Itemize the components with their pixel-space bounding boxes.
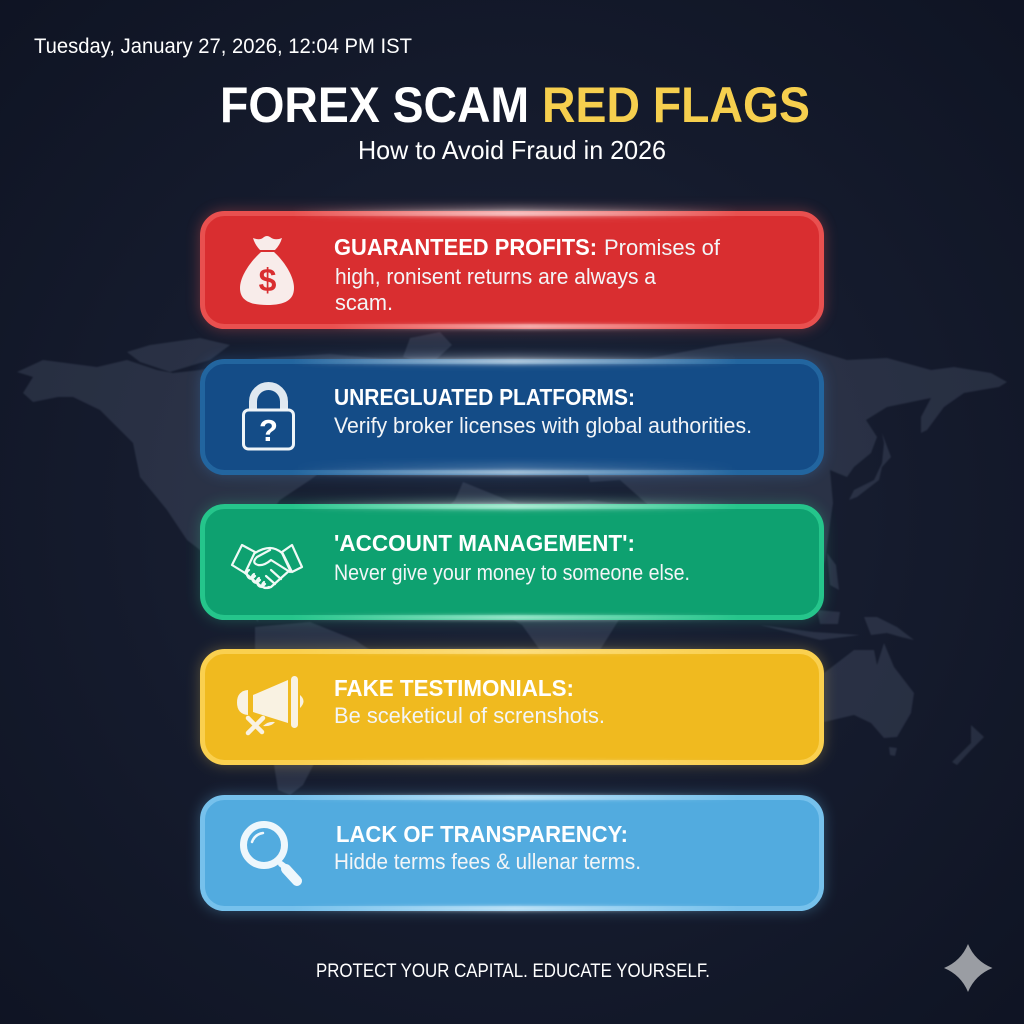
text: fake testimonials: Be sceketicul of screnshots. — [334, 703, 605, 728]
text: account management: 'ACCOUNT MANAGEMENT': — [334, 530, 635, 556]
text: lack of transparency — [334, 821, 641, 874]
world map — [17, 332, 1007, 795]
panel: unregulated platforms — [200, 355, 824, 475]
text: guaranteed profits: scam. — [335, 290, 393, 315]
text: guaranteed profits: Promises of — [604, 235, 721, 260]
text: unregulated platforms — [334, 384, 752, 438]
text: fake testimonials — [334, 675, 605, 728]
subtitle: How to Avoid Fraud in 2026 — [358, 135, 666, 165]
title: FOREX SCAM RED FLAGS — [220, 77, 810, 133]
text: guaranteed profits: GUARANTEED PROFITS: — [334, 234, 597, 260]
text: lack of transparency: Hidde terms fees & ullenar terms. — [334, 849, 641, 874]
text: unregulated platforms: Verify broker licenses with global authorities. — [334, 413, 752, 438]
icon: padlock with question mark — [244, 386, 294, 449]
panel: guaranteed profits — [200, 207, 824, 329]
text: fake testimonials: FAKE TESTIMONIALS: — [334, 675, 574, 701]
panel: account management — [200, 500, 824, 620]
text: guaranteed profits: high, ronisent returns are always a — [335, 264, 657, 289]
date and time: Tuesday, January 27, 2026, 12:04 PM IST — [34, 35, 412, 58]
icon: money bag: $ — [259, 262, 277, 298]
icon: padlock with question mark: ? — [259, 413, 278, 448]
icon: handshake — [232, 545, 302, 588]
panel: fake testimonials — [200, 649, 824, 765]
icon: megaphone with cross — [237, 676, 304, 733]
text: account management — [334, 530, 690, 585]
panel: lack of transparency — [200, 795, 824, 911]
text: guaranteed profits — [334, 234, 721, 315]
text: account management: Never give your money to someone else. — [334, 560, 690, 585]
icon: sparkle — [944, 944, 992, 992]
footer tagline: PROTECT YOUR CAPITAL. EDUCATE YOURSELF. — [316, 961, 710, 982]
icon: magnifying glass — [244, 824, 297, 881]
icon: money bag — [240, 236, 294, 305]
text: unregulated platforms: UNREGLUATED PLATFORMS: — [334, 384, 635, 410]
text: lack of transparency: LACK OF TRANSPARENCY: — [336, 821, 628, 847]
